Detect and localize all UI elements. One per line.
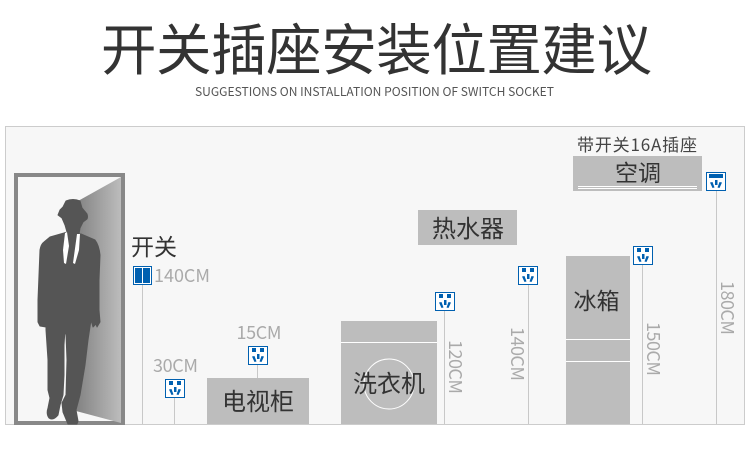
label: switch: 开关 [131,228,177,262]
icon: socket 15CM [248,346,268,364]
TV cabinet [207,378,309,424]
panel: room wall [6,126,744,424]
height 30CM: 30CM [153,352,198,378]
stem: 15CM [257,365,258,378]
refrigerator: 冰箱 [574,282,620,316]
washing machine: 洗衣机 [353,364,425,399]
height 120CM: 120CM [443,340,469,394]
icon: switch [134,266,152,284]
air conditioner: 空调 [615,154,661,188]
height 180CM: 180CM [715,281,741,335]
subtitle: SUGGESTIONS ON INSTALLATION POSITION OF SWITCH SOCKET [195,83,554,100]
icon: socket 30CM [166,380,184,398]
icon: socket 140CM [518,266,538,284]
switch height 140CM: 140CM [154,262,210,288]
icon: socket 120CM [436,292,454,310]
height 15CM: 15CM [236,319,282,345]
door with person [16,175,123,424]
stem: 30CM [174,398,175,424]
icon: socket 150CM [634,246,652,264]
title: 开关插座安装位置建议 [101,6,652,86]
refrigerator [566,256,630,424]
water heater: 热水器 [432,209,504,244]
stem: 120CM [444,311,445,424]
air conditioner [573,154,702,191]
stem: 150CM [642,265,643,424]
stem: 180CM [716,191,717,424]
washing machine [341,321,437,424]
stem: 140CM [528,285,529,424]
label: 16A socket with switch: 带开关16A插座 [577,131,697,156]
height 150CM: 150CM [641,322,667,376]
icon: 16A socket 180CM [706,172,726,190]
stem: switch [142,285,143,424]
height 140CM: 140CM [505,327,531,381]
TV cabinet: 电视柜 [222,382,294,417]
